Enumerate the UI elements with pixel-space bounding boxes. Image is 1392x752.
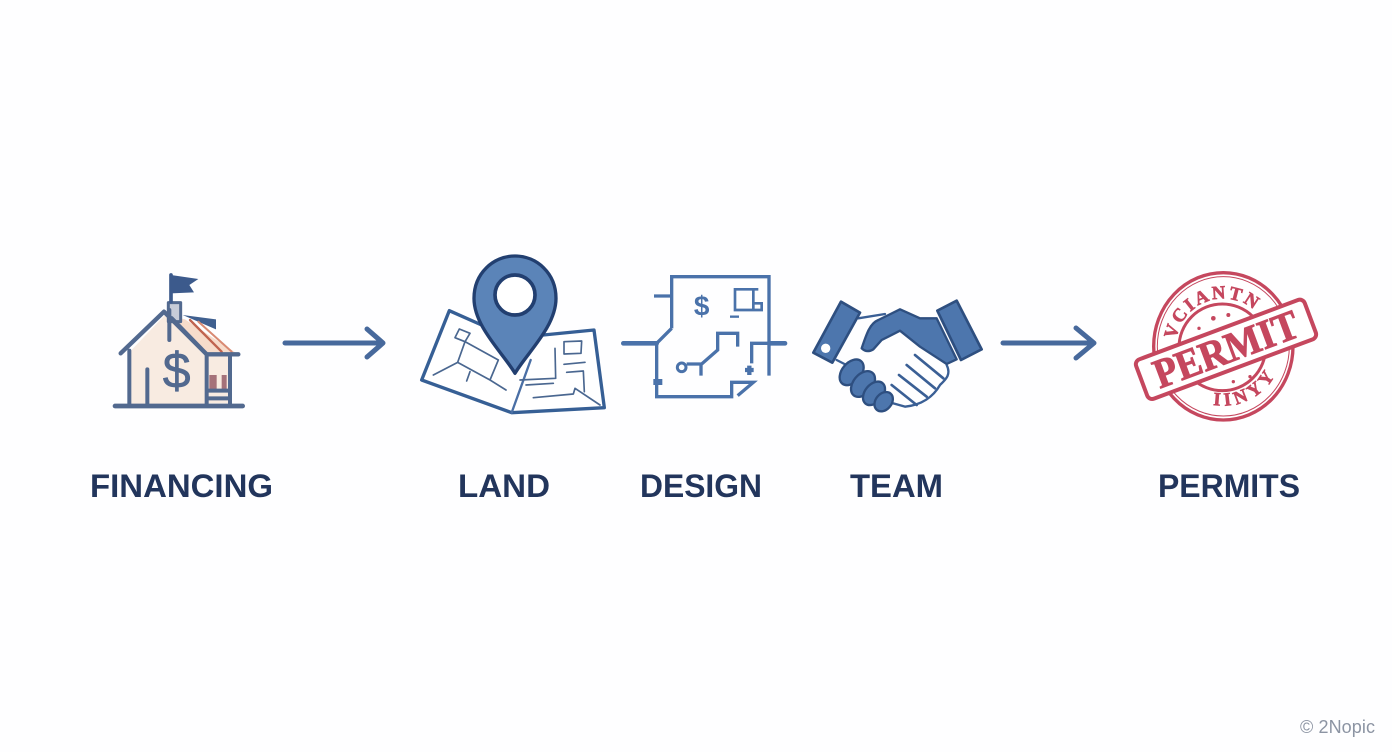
icon: handshake	[813, 301, 982, 415]
icon: permit stamp: IINYY	[1213, 369, 1274, 406]
icon: permit stamp: VCIANTN	[1164, 286, 1261, 336]
label: design: DESIGN	[640, 468, 762, 504]
icon: permit stamp: PERMIT	[1147, 301, 1305, 397]
label: land: LAND	[458, 468, 550, 504]
icon: house with dollar sign and flag: $	[163, 342, 191, 398]
arrow: team to permits	[1003, 328, 1094, 358]
icon: permit stamp	[1134, 271, 1318, 422]
icon: floor plan blueprint	[623, 277, 785, 397]
watermark: © 2Nopic	[1300, 717, 1375, 737]
icon: map with location pin	[422, 256, 604, 413]
label: team: TEAM	[850, 468, 943, 504]
icon: house with dollar sign and flag	[115, 275, 243, 406]
label: permits: PERMITS	[1158, 468, 1300, 504]
label: financing: FINANCING	[90, 468, 273, 504]
arrow: financing to land	[285, 329, 383, 357]
icon: floor plan blueprint: $	[694, 291, 710, 322]
